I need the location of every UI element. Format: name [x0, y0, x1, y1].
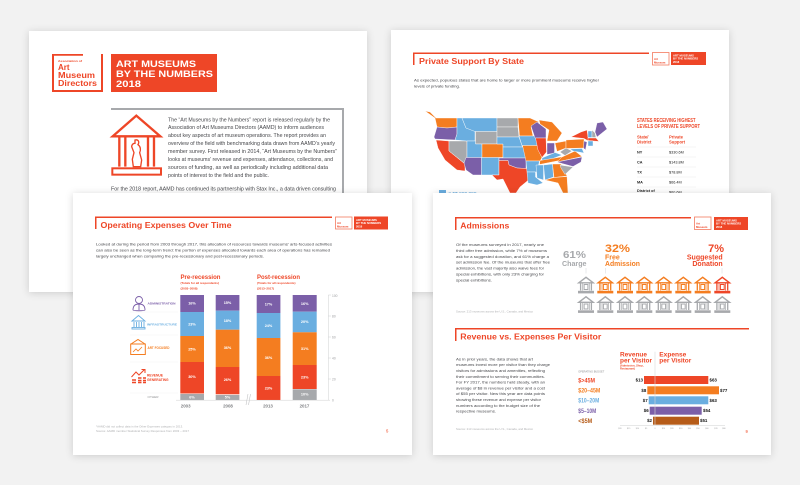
intro text: The “Art Museums by the Numbers” report is released regularly by the [168, 117, 330, 123]
mini logo and banner: 2018 [356, 224, 363, 228]
diverging bar chart: $10 [636, 428, 640, 430]
stacked bar: 2017: 23% [301, 376, 309, 380]
diverging bar chart: $51 [700, 418, 708, 423]
revenue text: numbers according to the budget size of the [456, 403, 540, 408]
mini logo and banner: ART MUSEUMS [673, 54, 694, 58]
stacked bar: 2003: 6% [189, 396, 195, 400]
stacked bar: 2008: 18% [224, 319, 232, 323]
chart heading: revenue per visitor: (Admission, Shop, [620, 363, 644, 367]
chart axes: 60 [332, 335, 336, 339]
chart heading: revenue per visitor: per Visitor [620, 358, 653, 364]
stat: 32% free admission: 32% [605, 243, 630, 255]
page number: 5 [386, 428, 389, 434]
diverging bar chart: $7 [643, 398, 648, 403]
diverging bar chart: $5–10M [578, 408, 596, 415]
logo: Association of Art Museum Directors: Directors [58, 79, 98, 88]
stacked bar: 2003: 16% [188, 302, 196, 306]
intro text: Association of Art Museums Directors (AAMD) to inform audiences [168, 125, 324, 131]
pre-recession heading [180, 274, 221, 290]
mini logo and banner: ART MUSEUMS [356, 218, 377, 222]
header rule [95, 216, 332, 229]
revenue text: their commitment to serving their communities. [456, 374, 545, 379]
stat: 7% suggested donation [687, 243, 724, 268]
mini logo and banner: BY THE NUMBERS [716, 222, 741, 226]
table: states receiving highest levels of private support: STATES RECEIVING HIGHEST [637, 118, 696, 124]
diverging bar chart: $10–20M [578, 398, 599, 405]
panel: operating expenses over time [73, 193, 412, 455]
chart axes: 2008 [223, 404, 233, 408]
stacked bar: 2003: 25% [188, 348, 196, 352]
axis break [246, 394, 250, 405]
heading: Operating Expenses Over Time [100, 221, 232, 230]
chart axes: 2013 [263, 404, 273, 408]
table: states receiving highest levels of private support: Private [669, 135, 684, 140]
legend separators [130, 312, 178, 393]
section rule [455, 328, 749, 341]
icon: museum with statue [112, 116, 161, 175]
table: states receiving highest levels of private support: State/ [637, 135, 649, 140]
label: revenue generating: REVENUE [147, 374, 163, 378]
stacked bar: 2013: 24% [265, 324, 273, 328]
mini logo and banner [694, 217, 748, 230]
diverging bar chart: $5 [645, 428, 648, 430]
diverging bar chart: $63 [710, 398, 717, 403]
table: states receiving highest levels of private support: Support [669, 140, 686, 145]
stat: 7% suggested donation: Donation [692, 261, 723, 268]
label: administration: ADMINISTRATION [148, 302, 176, 306]
diverging bar chart: $13 [636, 378, 644, 382]
intro text: can also be seen as the long-term trend: the portion of expenses allocated towards each area of operations has remained [96, 247, 330, 252]
diverging bar chart: $80 [722, 428, 727, 430]
stat: 61% charge [562, 249, 587, 268]
stacked bar: 2017: 10% [301, 392, 309, 396]
icon row: museums charging [578, 297, 730, 313]
table: states receiving highest levels of private support: $330.6M [669, 151, 684, 155]
mini logo and banner: ART MUSEUMS [716, 218, 737, 222]
logo: Association of Art Museum Directors: Association of [58, 59, 82, 63]
intro text: points of interest to the field and the public. [168, 173, 269, 179]
stacked bar: 2017: 31% [301, 347, 309, 351]
label: other: OTHER [148, 395, 159, 399]
intro text [414, 77, 600, 88]
table: states receiving highest levels of private support: $78.8M [669, 171, 682, 175]
chart heading: expense per visitor [659, 352, 692, 364]
grey frame [111, 108, 344, 193]
diverging bar chart: $6 [644, 408, 649, 413]
stacked bar: 2013 [257, 295, 280, 400]
stacked bar: 2008: 36% [224, 346, 232, 350]
table: states receiving highest levels of private support [637, 118, 701, 195]
stacked bar: 2008: 5% [225, 396, 231, 400]
diverging bar chart: $63 [710, 378, 717, 382]
admissions text [456, 242, 550, 282]
stat: 61% charge: Charge [562, 261, 587, 268]
stacked bar: 2003: 30% [188, 375, 196, 379]
post-recession heading: (2013–2017) [257, 286, 274, 290]
icon: revenue generating [132, 370, 146, 382]
chart axes: 2003 [181, 404, 191, 408]
source note: Source: 213 museums across the U.S., Canada, and Mexico [456, 310, 534, 314]
title banner [111, 54, 217, 92]
admissions text: special exhibitions. [456, 277, 492, 282]
table: states receiving highest levels of private support: TX [637, 171, 642, 175]
mini logo and banner: Museum [654, 60, 666, 64]
label: art focused: ART FOCUSED [148, 346, 170, 350]
table: states receiving highest levels of private support: NY [637, 151, 643, 155]
mini logo and banner [336, 216, 388, 230]
admissions text: Of the museums surveyed in 2017, nearly one [456, 242, 544, 247]
stacked bar: 2008 [216, 295, 239, 400]
post-recession heading: Post-recession [257, 274, 300, 281]
pre-recession heading: (2003–2008) [180, 286, 198, 290]
mini logo and banner [652, 52, 706, 65]
chart heading: expense per visitor: Expense [659, 352, 687, 358]
chart axes: 2017 [300, 404, 310, 408]
table: states receiving highest levels of private support: MA [637, 181, 643, 185]
heading: revenue vs expenses: Revenue vs. Expenses Per Visitor [460, 333, 601, 342]
admissions text: third offer free admission, while 7% of museums [456, 248, 547, 253]
stacked bar: 2013: 17% [265, 302, 273, 306]
diverging bar chart: $20–45M [578, 388, 600, 395]
logo: Association of Art Museum Directors [52, 54, 103, 92]
intro text: largely unchanged when comparing the pre-recessionary and post-recessionary periods. [96, 253, 264, 258]
revenue text: As in prior years, the data shows that art [456, 356, 534, 361]
chart axes: 20 [332, 377, 336, 381]
stacked bar: 2017: 20% [301, 320, 309, 324]
diverging bar chart: $20 [618, 428, 623, 430]
post-recession heading: (Totals for all respondents) [257, 281, 295, 285]
title banner: ART MUSEUMS [116, 59, 196, 70]
logo: Association of Art Museum Directors: Museum [58, 71, 95, 80]
stacked bar: 2008: 15% [224, 301, 232, 305]
mini logo and banner: Museum [337, 224, 349, 228]
table: states receiving highest levels of private support: District [637, 140, 652, 145]
revenue text: showing these revenue and expense per visitor [456, 397, 542, 402]
stat: 32% free admission [605, 243, 640, 268]
mini logo and banner: Art [696, 222, 700, 226]
admissions text: special exhibitions, with only 23% charging for [456, 272, 545, 276]
chart heading: revenue per visitor: Restaurant) [620, 366, 635, 370]
mini logo and banner: BY THE NUMBERS [356, 221, 381, 225]
diverging bar chart: $10 [662, 428, 666, 430]
logo: Association of Art Museum Directors: Art [58, 63, 70, 72]
page number: 9 [746, 429, 748, 434]
revenue text: visitors for admissions and amenities, reflecting [456, 368, 545, 373]
pointer lines [586, 268, 722, 274]
intro text: member survey. First released in 2014, “Art Museums by the Numbers” [168, 149, 337, 155]
table: states receiving highest levels of private support: CA [637, 161, 643, 165]
admissions text: admission, the vast majority also waive fees for [456, 266, 545, 271]
header rule [455, 217, 691, 230]
footnotes: *AAMD did not collect data in the Other Expenses category in 2013. [96, 424, 183, 428]
source note: Source: 213 museums across the U.S., Canada, and Mexico [456, 427, 534, 431]
intro text: about key aspects of art museum operations. The report provides an [168, 133, 326, 139]
stacked bar: 2003: 23% [188, 322, 196, 326]
mini logo and banner: BY THE NUMBERS [673, 57, 698, 61]
intro text [111, 117, 337, 192]
diverging bar chart: $8 [641, 388, 647, 393]
diverging bar chart: $40 [688, 428, 692, 430]
intro text: For the 2018 report, AAMD has continued its partnership with Stax Inc., a data driven consulting [111, 186, 336, 192]
stat: 32% free admission: Free [605, 254, 620, 261]
table: states receiving highest levels of private support: $60.6M [669, 191, 682, 195]
stacked bar: 2008: 26% [224, 378, 232, 382]
diverging bar chart: $20 [670, 428, 675, 430]
stat: 61% charge: 61% [563, 249, 587, 261]
pre-recession heading: (Totals for all respondents) [180, 281, 219, 285]
revenue text: For FY 2017, the numbers held steady, with an [456, 380, 545, 385]
icon row: museums charging and free [578, 277, 730, 293]
diverging bar chart: $15 [627, 428, 631, 430]
mini logo and banner: Art [337, 221, 341, 225]
intro text [96, 241, 332, 258]
diverging bar chart: <$5M [578, 418, 592, 425]
admissions text: set admission fee. Of the museums that offer free [456, 260, 550, 265]
mini logo and banner: 2018 [673, 60, 680, 64]
admissions text: ask for a suggested donation, and 61% charge a [456, 254, 550, 259]
mini logo and banner: Museum [696, 225, 708, 229]
intro text: As expected, populous states that are home to larger or more prominent museums receive higher [414, 77, 600, 82]
diverging bar chart: $77 [720, 388, 728, 393]
diverging bar chart: $30 [679, 428, 683, 430]
revenue text: of $55 per visitor. New this year are data points [456, 391, 545, 396]
panel: admissions and revenue vs expenses [433, 193, 771, 455]
stat: 7% suggested donation: Suggested [687, 254, 723, 261]
label: revenue generating: GENERATING [147, 378, 169, 382]
intro text: sources of funding, as well as periodically including additional data [168, 165, 329, 171]
title banner: BY THE NUMBERS [116, 69, 213, 80]
footnotes: Source: AAMD member Statistical Survey Responses from 2003 – 2017 [96, 429, 190, 433]
diverging bar chart: $54 [703, 408, 711, 413]
revenue text [456, 356, 550, 414]
mini logo and banner: Art [654, 57, 658, 61]
chart axes: 80 [332, 314, 336, 318]
diverging bar chart: $70 [714, 428, 719, 430]
revenue text: museums invest more per visitor than they charge [456, 362, 550, 367]
table: states receiving highest levels of private support: $66.4M [669, 181, 682, 185]
mini logo and banner: 2018 [716, 225, 723, 229]
icon: art focused [131, 340, 145, 354]
stacked bar: 2017 [293, 295, 317, 400]
post-recession heading [257, 274, 300, 290]
chart heading: expense per visitor: per Visitor [659, 358, 692, 364]
map legend [439, 190, 477, 196]
table: states receiving highest levels of private support: LEVELS OF PRIVATE SUPPORT [637, 124, 701, 130]
stacked bar: 2003 [180, 295, 204, 400]
operating budget label: OPERATING BUDGET [578, 371, 605, 374]
label: infrastructure: INFRASTRUCTURE [147, 322, 177, 326]
header rule [413, 52, 649, 65]
stacked bar: 2013: 23% [265, 387, 273, 391]
footnotes [96, 424, 190, 433]
chart axes: 100 [332, 294, 338, 298]
icon: administration [133, 296, 145, 311]
chart axes: 0 [332, 398, 334, 402]
icon: infrastructure [132, 316, 145, 329]
stat: 7% suggested donation: 7% [708, 243, 724, 255]
intro text: levels of private funding. [414, 83, 460, 88]
diverging bar chart: 0 [654, 428, 656, 430]
stacked bar: 2013: 36% [265, 356, 273, 360]
title banner: 2018 [116, 79, 141, 90]
chart heading: revenue per visitor [620, 352, 653, 370]
map of US states by private support [425, 111, 607, 193]
heading: Private Support By State [419, 57, 525, 66]
table: states receiving highest levels of private support: $143.8M [669, 161, 684, 165]
diverging bar chart: $60 [705, 428, 710, 430]
diverging bar chart: $>45M [578, 377, 595, 384]
panel: intro page [29, 31, 367, 292]
chart axes: 40 [332, 356, 336, 360]
panel: private support by state [391, 30, 729, 292]
diverging bar chart: $2 [647, 418, 653, 423]
diverging bar chart [578, 352, 728, 430]
intro text: looks at museums’ revenue and expenses, attendance, collections, and [168, 157, 333, 163]
heading: admissions: Admissions [460, 222, 510, 231]
diverging bar chart: $50 [696, 428, 701, 430]
intro text: overview of the field with benchmarking data drawn from AAMD’s yearly [168, 141, 335, 147]
map legend: ≥ $5,000,000 [448, 190, 477, 196]
revenue text: average of $8 in revenue per visitor and a cost [456, 385, 546, 390]
revenue text: respective museums. [456, 409, 496, 414]
intro text: Looked at during the period from 2003 through 2017, this allocation of resources towards museums’ arts-focused activities [96, 241, 332, 246]
label: revenue generating [147, 374, 169, 382]
table: states receiving highest levels of private support: District of [637, 189, 655, 193]
stat: 32% free admission: Admission [605, 261, 640, 268]
stacked bar: 2017: 16% [301, 302, 309, 306]
pre-recession heading: Pre-recession [180, 274, 221, 281]
chart axes [176, 294, 338, 408]
chart heading: revenue per visitor: Revenue [620, 352, 648, 358]
